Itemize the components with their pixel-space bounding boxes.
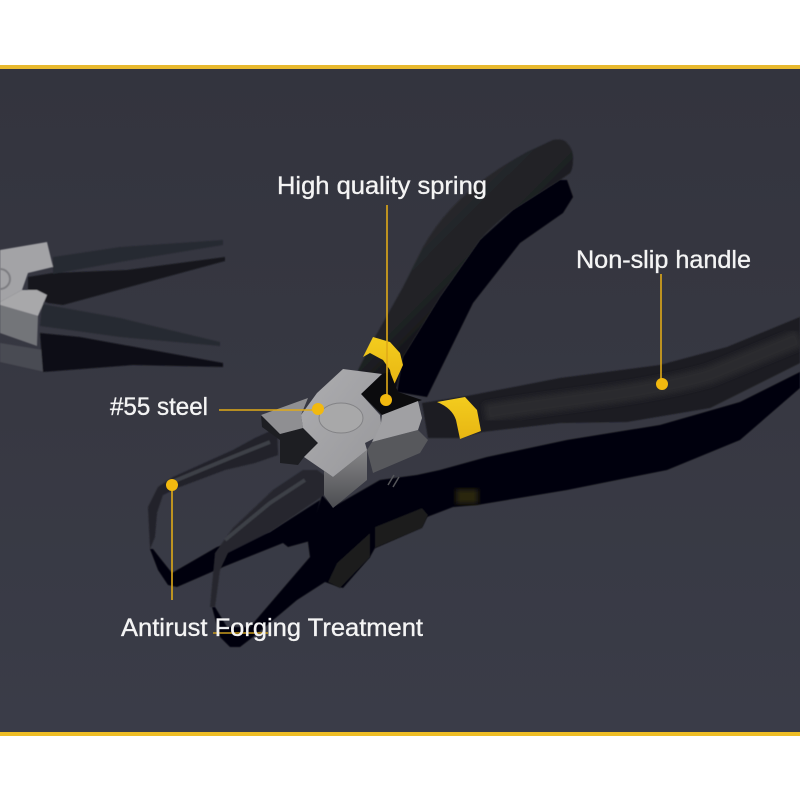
right arm top [372,401,422,442]
lower handle yellow band [437,397,481,439]
second pliers at left edge [0,240,225,372]
reflection of pliers on glossy surface [150,180,800,647]
label: antirust forging treatment: Antirust Forging Treatment [121,614,423,642]
callout: high quality spring [277,172,487,406]
reflection: left jaw [150,500,320,587]
reflection: upper handle [397,180,573,397]
label: high quality spring: High quality spring [277,172,487,200]
reflection: right jaw, head and lower handle [212,372,800,647]
right jaw [210,470,327,607]
lower handle sheen [485,338,800,413]
plier head [261,369,428,508]
reflected band glow [456,489,478,504]
reflected metal of head [375,508,428,548]
upper handle [358,139,573,393]
left jaw [148,428,278,549]
callout: #55 steel [110,393,324,421]
bottom yellow rule [0,732,800,736]
spring coil marks [388,475,399,487]
pivot rivet [319,403,363,433]
spring gap [361,372,422,415]
lower handle [422,317,800,438]
left arm side [261,415,318,465]
right arm side [367,430,428,473]
top yellow rule [0,65,800,69]
upper handle yellow band [363,337,403,387]
left arm top [261,398,308,434]
centre front face [324,450,367,508]
jaw highlights [172,442,305,540]
callout: non-slip handle [576,246,751,390]
label: non-slip handle: Non-slip handle [576,246,751,274]
callout: antirust forging treatment [121,479,423,642]
centre top [301,369,382,477]
label: #55 steel: #55 steel [110,393,208,421]
